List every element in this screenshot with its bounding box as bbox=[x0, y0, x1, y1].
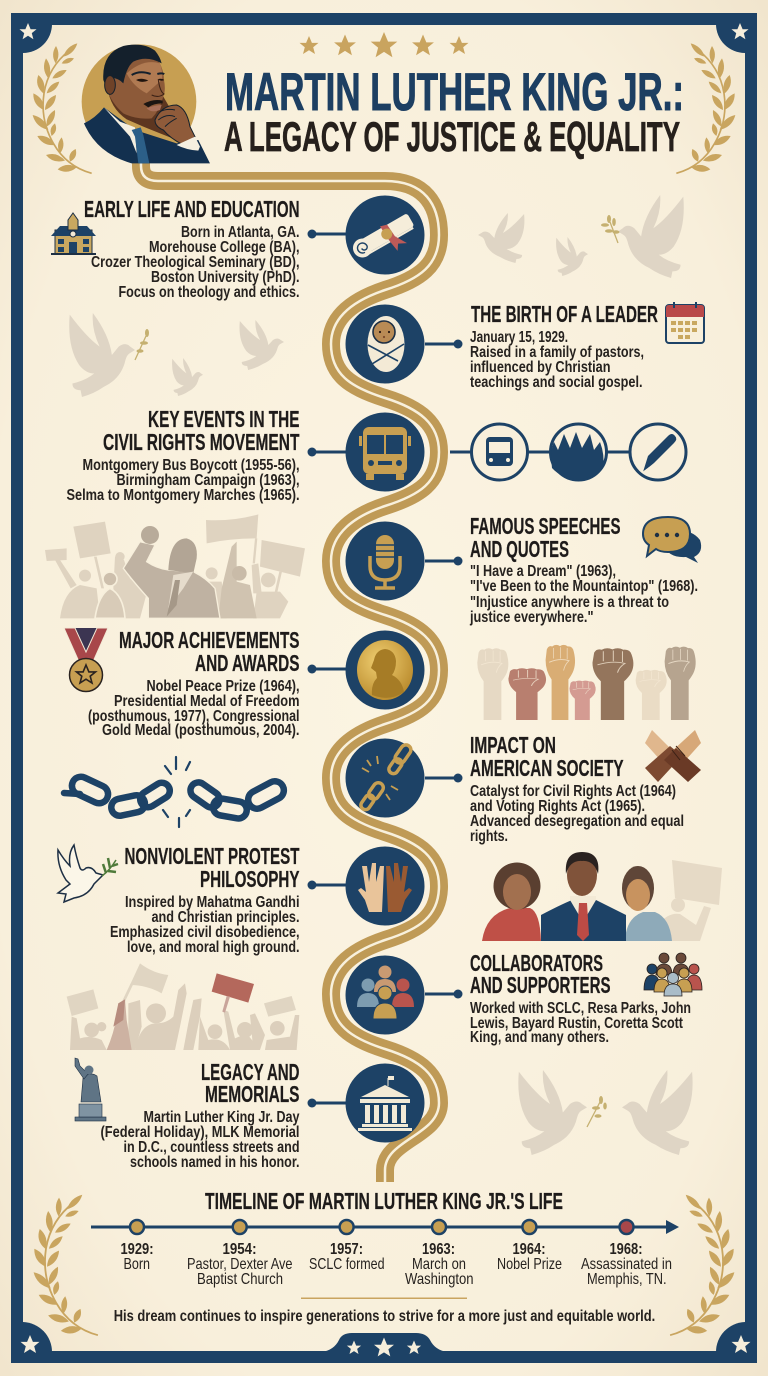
section: legacy and memorials: in D.C., countless streets and bbox=[124, 1139, 300, 1156]
laurel: top right bbox=[676, 43, 735, 173]
section: major achievements and awards: Presidential Medal of Freedom bbox=[114, 693, 300, 710]
section: nonviolent protest philosophy: love, and moral high ground. bbox=[127, 939, 300, 956]
section: impact on american society: Advanced desegregation and equal bbox=[470, 813, 684, 830]
decorative doves upper left bbox=[69, 313, 284, 397]
section: nonviolent protest philosophy: Emphasized civil disobedience, bbox=[110, 924, 300, 941]
timeline chart: 1954: bbox=[222, 1241, 256, 1258]
section: early life and education bbox=[84, 196, 300, 301]
section: famous speeches and quotes: justice everywhere." bbox=[469, 609, 594, 626]
section: nonviolent protest philosophy: PHILOSOPHY bbox=[200, 866, 300, 892]
timeline chart: 1968: bbox=[610, 1241, 642, 1258]
section: collaborators and supporters: COLLABORATORS bbox=[470, 950, 603, 976]
section: famous speeches and quotes: "I've Been to the Mountaintop" (1968). bbox=[470, 578, 698, 595]
section: legacy and memorials: schools named in his honor. bbox=[130, 1154, 300, 1171]
section: major achievements and awards: MAJOR ACHIEVEMENTS bbox=[119, 627, 300, 653]
section: famous speeches and quotes: FAMOUS SPEECHES bbox=[470, 513, 620, 539]
icon: microphone bbox=[370, 535, 400, 588]
section: legacy and memorials: MEMORIALS bbox=[205, 1081, 300, 1107]
icon: diploma scroll bbox=[349, 211, 421, 270]
section: key events in the civil rights movement: Montgomery Bus Boycott (1955-56), bbox=[82, 457, 300, 474]
section: collaborators and supporters: King, and many others. bbox=[470, 1029, 609, 1046]
icon: medal bbox=[64, 628, 108, 692]
node circles and connectors bbox=[308, 196, 650, 1142]
timeline chart: Washington bbox=[405, 1271, 474, 1288]
section: major achievements and awards: Gold Medal (posthumous, 2004). bbox=[102, 722, 300, 739]
icon: clasped hands bbox=[645, 730, 701, 782]
section: key events in the civil rights movement: Birmingham Campaign (1963), bbox=[116, 472, 300, 489]
section: the birth of a leader: influenced by Christian bbox=[470, 359, 610, 376]
section: impact on american society: IMPACT ON bbox=[470, 732, 556, 758]
section: collaborators and supporters: Lewis, Bayard Rustin, Coretta Scott bbox=[470, 1015, 684, 1032]
laurel: bottom right bbox=[670, 1195, 734, 1335]
section: collaborators and supporters: Worked with SCLC, Resa Parks, John bbox=[470, 1000, 691, 1017]
section: major achievements and awards: Nobel Peace Prize (1964), bbox=[146, 678, 300, 695]
title bbox=[224, 63, 684, 160]
top stars bbox=[300, 32, 468, 57]
timeline chart: Memphis, TN. bbox=[587, 1271, 666, 1288]
section: nonviolent protest philosophy bbox=[110, 843, 300, 956]
timeline chart: March on bbox=[412, 1256, 466, 1273]
section: major achievements and awards: (posthumous, 1977), Congressional bbox=[88, 708, 300, 725]
timeline chart: 1963: bbox=[422, 1241, 455, 1258]
section: impact on american society: Catalyst for Civil Rights Act (1964) bbox=[470, 783, 676, 800]
section: famous speeches and quotes: "I Have a Dream" (1963), bbox=[470, 563, 616, 580]
section: collaborators and supporters bbox=[470, 950, 691, 1046]
section: early life and education: EARLY LIFE AND EDUCATION bbox=[84, 196, 300, 222]
icon: swaddled baby bbox=[368, 316, 404, 372]
section: early life and education: Boston University (PhD). bbox=[151, 269, 300, 286]
section: legacy and memorials: Martin Luther King Jr. Day bbox=[144, 1109, 300, 1126]
icon: calendar bbox=[666, 302, 704, 343]
section: nonviolent protest philosophy: Inspired by Mahatma Gandhi bbox=[125, 894, 300, 911]
timeline chart: SCLC formed bbox=[309, 1256, 384, 1273]
portrait of Dr. King bbox=[82, 44, 210, 163]
timeline chart: Pastor, Dexter Ave bbox=[187, 1256, 293, 1273]
timeline chart: 1964: bbox=[512, 1241, 546, 1258]
broken chain illustration bbox=[64, 757, 287, 827]
icon: group of people bbox=[357, 966, 414, 1019]
icon: memorial building bbox=[358, 1076, 412, 1131]
section: early life and education: Focus on theology and ethics. bbox=[118, 284, 300, 301]
section: impact on american society: and Voting Rights Act (1965). bbox=[470, 798, 645, 815]
section: the birth of a leader: teachings and social gospel. bbox=[470, 374, 642, 391]
icon: open hands bbox=[358, 863, 412, 912]
icon: schoolhouse bbox=[51, 213, 96, 255]
section: major achievements and awards bbox=[88, 627, 300, 739]
section: key events in the civil rights movement: Selma to Montgomery Marches (1965). bbox=[66, 487, 300, 504]
section: early life and education: Crozer Theological Seminary (BD), bbox=[91, 254, 300, 271]
section: the birth of a leader: THE BIRTH OF A LEADER bbox=[471, 301, 658, 327]
section: major achievements and awards: AND AWARDS bbox=[195, 650, 300, 676]
timeline chart: Born bbox=[124, 1256, 150, 1273]
raised fists bbox=[477, 645, 696, 720]
section: nonviolent protest philosophy: NONVIOLENT PROTEST bbox=[124, 843, 300, 869]
timeline chart: Nobel Prize bbox=[497, 1256, 562, 1273]
section: legacy and memorials bbox=[100, 1059, 300, 1171]
section: impact on american society bbox=[470, 732, 684, 845]
timeline chart: Baptist Church bbox=[197, 1271, 283, 1288]
section: nonviolent protest philosophy: and Christian principles. bbox=[152, 909, 300, 926]
section: the birth of a leader: Raised in a family of pastors, bbox=[470, 344, 644, 361]
winding timeline ribbon bbox=[141, 160, 439, 1182]
section: key events in the civil rights movement: KEY EVENTS IN THE bbox=[148, 406, 300, 432]
icon: Nobel medal bbox=[357, 640, 413, 700]
icon: broken chain bbox=[359, 743, 413, 811]
section: early life and education: Born in Atlanta, GA. bbox=[181, 224, 300, 241]
section: the birth of a leader: January 15, 1929. bbox=[470, 329, 568, 346]
laurel: bottom left bbox=[34, 1195, 98, 1335]
section: famous speeches and quotes: "Injustice anywhere is a threat to bbox=[470, 594, 669, 611]
timeline chart: 1929: bbox=[120, 1241, 154, 1258]
timeline chart bbox=[91, 1220, 679, 1288]
section: legacy and memorials: (Federal Holiday), MLK Memorial bbox=[100, 1124, 300, 1141]
section: impact on american society: rights. bbox=[470, 828, 508, 845]
icon: speech bubbles bbox=[643, 517, 701, 563]
section: legacy and memorials: LEGACY AND bbox=[201, 1059, 300, 1085]
decorative doves lower right bbox=[518, 1070, 693, 1155]
section: key events in the civil rights movement: CIVIL RIGHTS MOVEMENT bbox=[103, 429, 300, 455]
laurel: top left bbox=[33, 43, 92, 173]
protest crowd silhouette bbox=[45, 514, 305, 618]
heading: timeline of his life: TIMELINE OF MARTIN LUTHER KING JR.'S LIFE bbox=[205, 1188, 563, 1214]
section: famous speeches and quotes: AND QUOTES bbox=[470, 536, 569, 562]
icon row: bus, crowd, pen bbox=[472, 424, 686, 480]
crowd with banners silhouette bbox=[67, 963, 299, 1050]
icon: white dove with olive branch bbox=[58, 845, 118, 902]
icon: statue bbox=[75, 1058, 106, 1121]
closing statement: His dream continues to inspire generations to strive for a more just and equitable world. bbox=[114, 1308, 655, 1325]
timeline chart: Assassinated in bbox=[581, 1256, 672, 1273]
icon: bus bbox=[359, 427, 411, 480]
section: key events in the civil rights movement bbox=[66, 406, 300, 504]
section: collaborators and supporters: AND SUPPORTERS bbox=[470, 972, 610, 998]
three people illustration bbox=[482, 852, 722, 941]
icon: supporters group bbox=[644, 953, 702, 996]
section: early life and education: Morehouse College (BA), bbox=[149, 239, 300, 256]
timeline chart: 1957: bbox=[330, 1241, 363, 1258]
decorative doves upper right bbox=[478, 195, 684, 278]
section: the birth of a leader bbox=[470, 301, 658, 391]
section: famous speeches and quotes bbox=[469, 513, 698, 626]
section: impact on american society: AMERICAN SOCIETY bbox=[470, 755, 624, 781]
